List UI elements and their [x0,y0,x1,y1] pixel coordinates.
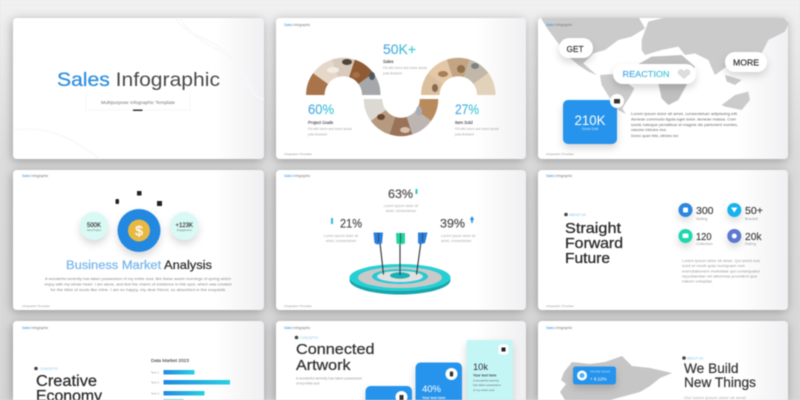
heading: Business Market Analysis [66,260,212,272]
footer: Infographic Template [546,152,574,156]
stat: 50K+: Fill with lorem and insert actual [383,66,427,70]
stat: 60%: 60% [308,102,334,117]
icon: dollar coin [118,209,160,252]
header: Sales Infographic [284,174,311,178]
heading [684,361,756,390]
header: Sales Infographic [546,174,573,178]
badge: +123K: Engagement [177,228,192,232]
stat: 20k: 20k [745,232,763,243]
callout: GET [559,38,593,58]
bar chart: Text 2 [151,380,159,384]
header: Sales Infographic [22,326,49,330]
heading: Future [565,250,610,267]
stat: 39%: Lorem ipsum dolor sit [441,234,475,238]
stat: 60%: Fill with lorem and insert actual [308,127,352,131]
photo arc 1 [315,59,375,95]
callout: map value: + 9.12% [590,376,607,382]
header: Sales Infographic [22,174,49,178]
panel: business market analysis [13,170,264,310]
text block: A wonderful serenity has taken possession of my entire soul, like these sweet mornings of spring which [45,277,231,281]
title: Sales Infographic [57,69,220,91]
heading: Connected [296,341,374,358]
text block [44,277,232,292]
card: 210K [563,94,624,144]
header: Sales Infographic [284,326,311,330]
text block: Donec quam felis, ultricies nec [631,134,679,138]
footer: Infographic Template [546,304,574,308]
stat: 27%: Item Sold [455,120,473,125]
stat: 50+: 50+ [745,206,763,217]
callout: REACTION [613,64,696,84]
card: 10k: has taken possession [473,383,501,387]
badge: +123K [170,212,198,240]
subtitle box [86,93,190,111]
world map [540,17,789,114]
arrows [374,232,428,275]
stat: 50K+ [383,41,427,76]
stat: 21%: Lorem ipsum dolor sit [324,234,358,238]
heading: We Build [684,361,738,376]
badge: 500K: New Project [87,228,101,232]
callout: MORE: MORE [733,58,759,68]
photo arc 2 [373,99,429,133]
footer: Infographic Template [22,304,50,308]
stat: 120: Collection [696,242,713,246]
subtitle box: Multipurpose Infographic Template [101,100,176,105]
stat: 63%: 63% [388,187,413,201]
card: 10k: A wonderful serenity [473,378,500,382]
heading: Forward [565,235,623,252]
heading: New Things [684,375,756,390]
stat: 300: 300 [696,206,714,217]
badge: 500K [80,212,108,240]
card: 40%: Your text here [422,396,446,400]
stat: 27%: 27% [455,102,479,117]
card: 210K: 210K [574,113,606,128]
callout: map value [573,366,616,384]
badge: +123K: +123K [176,223,193,229]
kicker: CONCEPTS [40,367,58,371]
stat: 50+ [727,203,763,221]
panel: connected artwork [276,321,526,400]
stat: 63%: Lorem ipsum dolor sit [384,204,418,208]
stat: 120 [678,229,713,246]
footer: Infographic Template [284,304,312,308]
panel: world map [538,17,789,159]
panel: photo wave [276,18,526,159]
heading [565,220,623,267]
bar chart: Text 3 [151,392,159,396]
stat: 63%: amet, consectetuer [386,209,417,213]
stat: 39% [440,216,475,243]
stat: 300: Selling [696,217,707,221]
stat: 60%: puta tincidunt [308,132,327,136]
icon: badge [610,94,624,108]
text block [631,112,738,138]
kicker: CONCEPTS [300,336,318,340]
text block: repudiandae vel laboriosa provident qua [682,274,757,278]
stat: 27%: Fill with lorem and insert actual [455,127,499,131]
text block: exercitationem molestiae qui consequatur [682,270,761,274]
stat: 50+: Bracket [745,217,759,221]
card: 210K: Great Gold [582,127,598,131]
stat: 120: 120 [696,232,712,243]
stat: 21%: amet, consectetuer [326,239,357,243]
stat: 60%: Project Goals [308,120,333,125]
icon: dollar coin: $ [135,222,143,238]
stat: 39%: 39% [440,216,465,230]
text block [296,376,362,386]
panel: we build new things [538,321,788,400]
stat: 20k [727,229,763,246]
heading: Creative [36,373,97,390]
panel: straight forward future [538,170,788,310]
card: third [366,386,412,400]
text block [682,259,761,284]
icons: small top [116,191,162,206]
map [560,356,672,400]
panel: title slide [13,18,264,159]
card: 40% [416,362,462,400]
stat: 50K+: 50K+ [383,41,416,57]
text block: Our lorem ipsum dolor sit amet [684,396,746,400]
footer: Infographic Template [284,152,312,156]
text block: sociis natoque penatibus et magnis dis parturient montes, [631,123,738,127]
card: 40%: 40% [422,384,441,394]
stat: 50K+: Sales [383,59,393,64]
stat: 39%: amet, consectetuer [441,239,472,243]
header: Sales Infographic [546,23,573,27]
text block: Lorem ipsum dolor sit amet, consectetuer adipiscing elit. [631,112,738,116]
stat: 63% [384,187,418,213]
bar chart: Data Market 2023 [151,358,190,363]
heading: Straight [565,220,622,237]
text block: Aenean commodo ligula eget dolor. Aenean massa. Cum [631,118,736,122]
stat: 27%: puta tincidunt [455,132,474,136]
badge: 500K: 500K [87,223,101,229]
text block: for the bliss of souls like mine. I am so happy, my dear friend, so absorbed in the exquisite [50,288,226,292]
heading [296,341,374,374]
heading [36,373,102,400]
kicker: ABOUT US [570,213,586,217]
heading: Artwork [296,357,351,374]
target illustration [350,264,450,294]
stat: 20k: Rating [745,242,756,246]
bar chart [151,358,230,400]
text block: sunt et modi quia numquam non [682,264,745,268]
card: 10k: 10k [473,362,489,372]
card: 10k [466,340,513,400]
callout: MORE [725,52,767,72]
kicker: ABOUT US [687,356,703,360]
text block: nascetur ridiculus mus. [631,128,667,132]
photo arc 3 [430,63,486,95]
text block: enjoy with my whole heart. I am alone, and feel the charm of existence in this spot, which was created [44,282,232,286]
stat: 300 [678,203,714,221]
panel: target [276,170,526,310]
callout: REACTION: REACTION [622,69,670,79]
text block: natum voluptas [682,280,712,284]
panel: creative economy [13,321,264,400]
text block: Lorem ipsum dolor sit amet. Qui animi eos [682,259,760,263]
text block: of my entire soul [296,382,320,386]
card: 10k: of my entire soul [473,388,495,392]
callout: map value: ONLINE SALES [590,370,610,374]
card: 10k: Your text here [473,374,497,378]
header: Sales Infographic [284,23,311,27]
header: Sales Infographic [546,326,573,330]
stat: 27% [455,102,499,136]
text block: A wonderful serenity has taken possession [296,376,362,380]
stat: 21% [324,216,362,243]
bar chart: Text 1 [151,370,159,374]
icon: heart [678,69,690,79]
stat: 60% [308,102,352,136]
stat: 50K+: puta tincidunt [383,72,402,76]
stat: 21%: 21% [340,216,362,230]
callout: GET: GET [566,45,584,54]
